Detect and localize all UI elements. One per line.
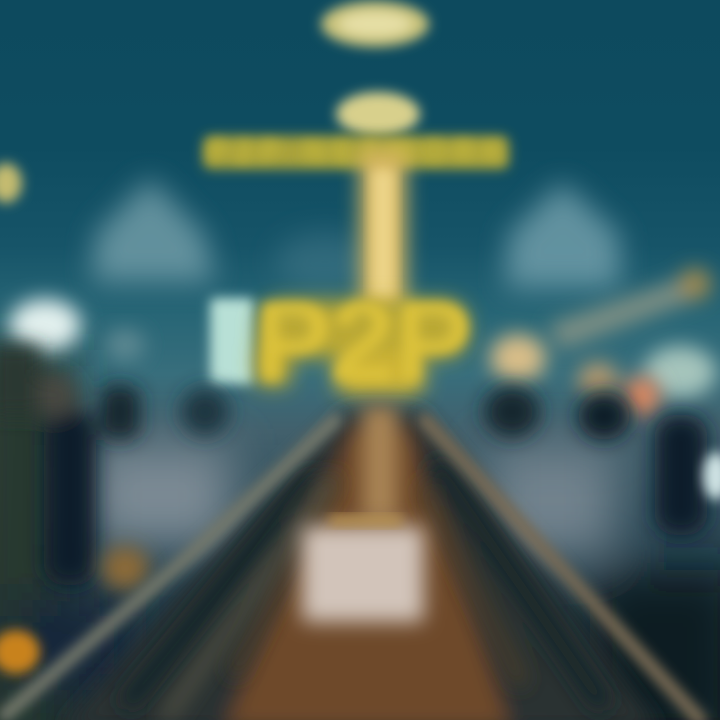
people silhouettes right [484, 386, 707, 535]
signpost cap [336, 92, 420, 136]
orange spots left [0, 630, 40, 674]
left edge lamp [0, 163, 22, 203]
right rail [425, 420, 700, 720]
logo text: P2P [255, 279, 471, 404]
inner rail left [165, 480, 330, 720]
orange spot mid left [101, 546, 149, 590]
signpost banner [203, 136, 509, 169]
right crane arm [548, 268, 711, 350]
icon: left ghost cloud [92, 178, 215, 282]
left rail [5, 420, 335, 715]
white lamp left [9, 299, 81, 351]
people silhouettes left [0, 345, 229, 585]
pale tile behind logo [210, 298, 254, 384]
signpost: yellow cross [203, 92, 509, 315]
icon: right ghost cloud [505, 182, 620, 288]
signpost column [360, 150, 406, 315]
bridge deck [60, 410, 660, 720]
icon: centre ghost shape [275, 232, 375, 292]
bridge planks dark stripes [130, 470, 600, 700]
signpost banner text: P2P NETWORK [208, 136, 504, 168]
left glow small [105, 329, 145, 361]
white glow right edge [703, 452, 720, 500]
centre panel warm top [330, 516, 402, 526]
signpost column highlight [372, 170, 394, 300]
background: ground haze [0, 350, 720, 720]
centre glowing panel [302, 526, 424, 622]
centre post [362, 405, 398, 520]
right pale glow [644, 346, 716, 398]
top lamp [321, 1, 429, 47]
warm lamps right [490, 334, 660, 416]
logo blob [255, 300, 468, 396]
